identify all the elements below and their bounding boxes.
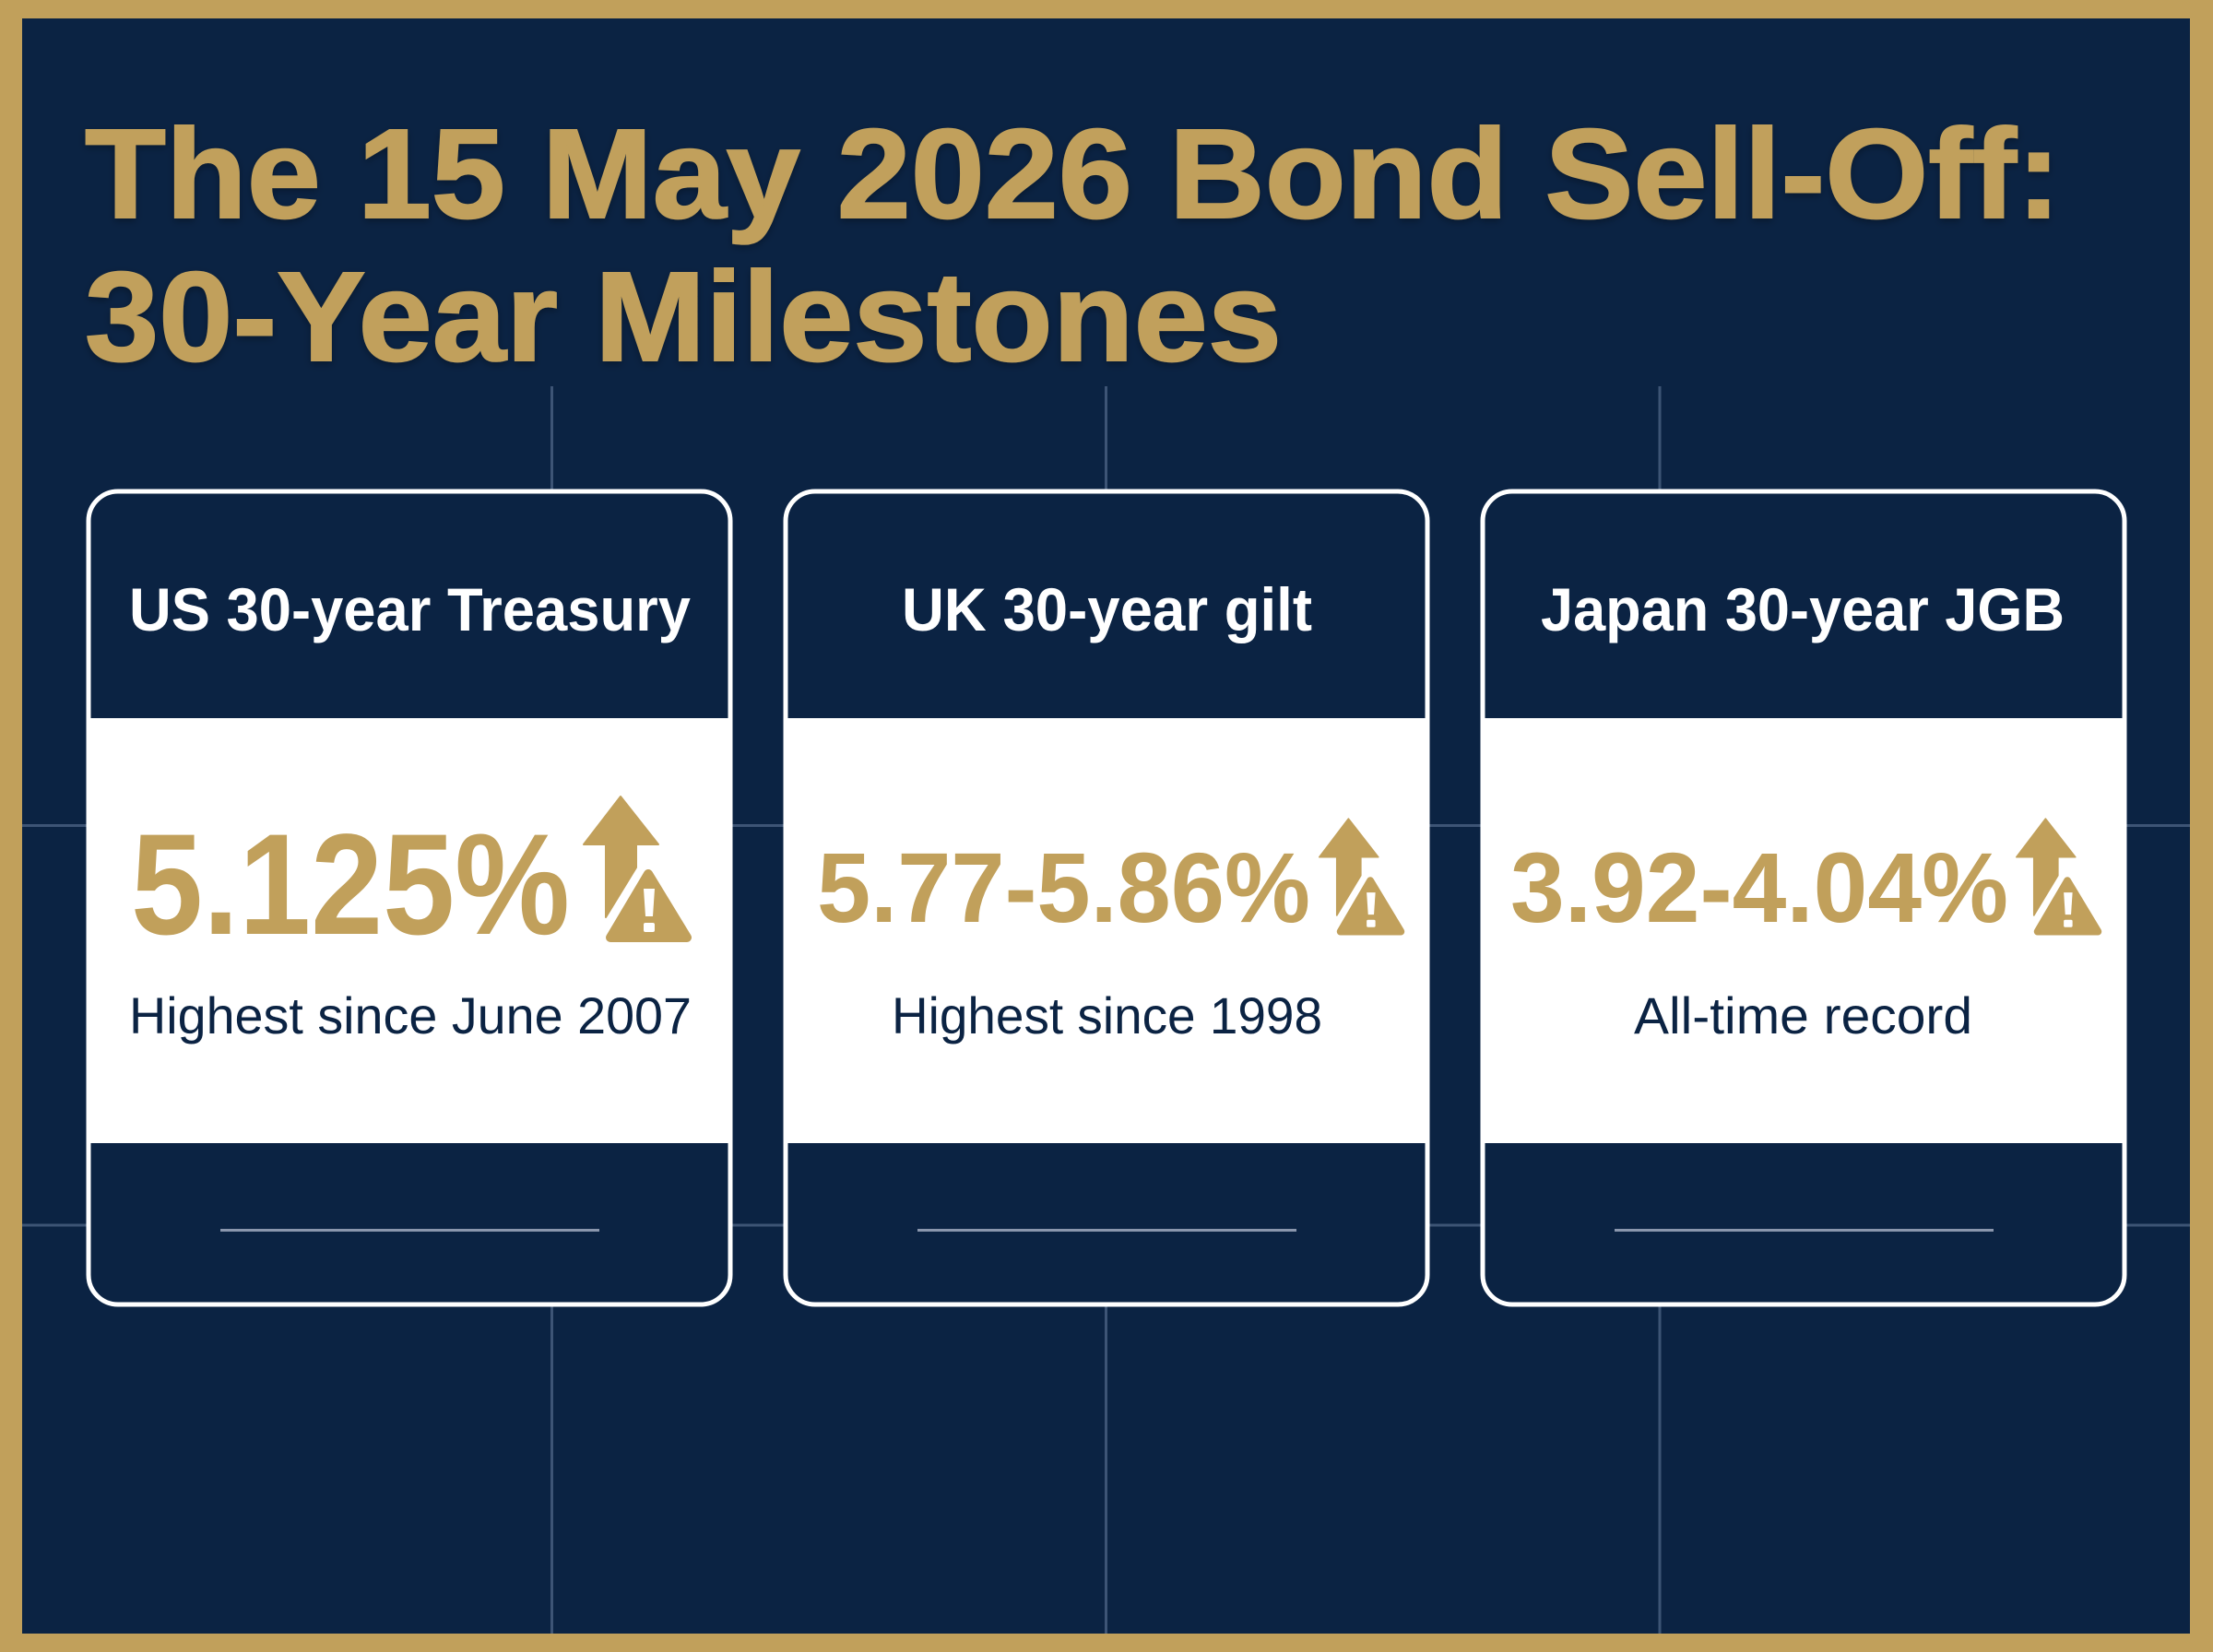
title bbox=[85, 103, 2061, 388]
card body band bbox=[784, 718, 1429, 1143]
panel: UK 30-year gilt bbox=[784, 491, 1429, 1304]
caption: All-time record bbox=[1634, 986, 1972, 1044]
yield value: 3.92-4.04% bbox=[1510, 832, 2008, 943]
footer rule bbox=[1615, 1229, 1994, 1232]
panel: Japan 30-year JGB bbox=[1481, 491, 2126, 1304]
title: 30-Year Milestones bbox=[85, 246, 1282, 388]
icon: arrow with warning bbox=[584, 796, 687, 938]
card heading: Japan 30-year JGB bbox=[1541, 575, 2065, 643]
caption: Highest since June 2007 bbox=[129, 986, 692, 1044]
icon: arrow with warning bbox=[2017, 819, 2098, 931]
card heading: US 30-year Treasury bbox=[129, 575, 691, 643]
footer rule bbox=[220, 1229, 599, 1232]
footer rule bbox=[917, 1229, 1296, 1232]
yield value: 5.77-5.86% bbox=[817, 832, 1310, 943]
caption: Highest since 1998 bbox=[892, 986, 1322, 1044]
icon: arrow with warning bbox=[1320, 819, 1401, 931]
card heading: UK 30-year gilt bbox=[902, 575, 1312, 643]
card body band bbox=[87, 718, 732, 1143]
title: The 15 May 2026 Bond Sell-Off: bbox=[85, 103, 2061, 245]
yield value: 5.125% bbox=[131, 805, 570, 965]
card body band bbox=[1481, 718, 2126, 1143]
panel: US 30-year Treasury bbox=[87, 491, 732, 1304]
